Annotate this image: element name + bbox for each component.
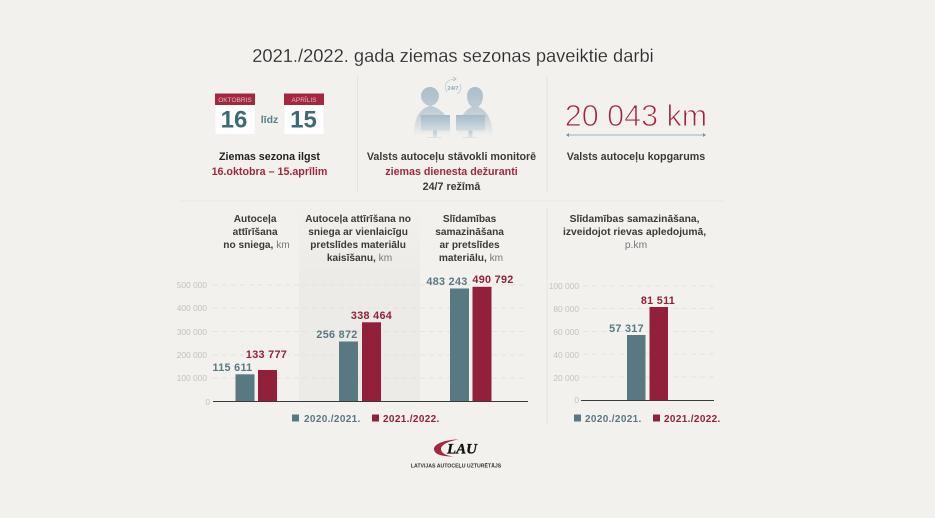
icon: calendar October 16: OKTOBRIS: [218, 97, 252, 104]
axis labels: [177, 280, 210, 407]
heading: slipperiness reduction: Slīdamības: [443, 214, 497, 225]
panel: left chart highlight: [299, 205, 420, 401]
heading: snow clearing: no sniega, km: [223, 240, 290, 251]
icon: two duty officers with 24/7: 24/7: [447, 86, 459, 92]
heading: rut icing: p.km: [625, 240, 647, 251]
bars: clearing with spreading: 338 464: [351, 310, 392, 322]
bars: rut icing: [609, 295, 675, 400]
text: until: līdz: [261, 114, 278, 126]
heading: slipperiness reduction: ar pretslīdes: [439, 240, 500, 251]
heading: rut icing: izveidojot rievas apledojumā,: [563, 227, 706, 238]
axis labels: 400 000: [177, 303, 207, 313]
text: road length caption: Valsts autoceļu kopgarums: [567, 151, 705, 163]
logo: LAU: [411, 440, 502, 470]
legend: right chart: 2021./2022.: [664, 414, 721, 425]
icon: calendar April 15: APRĪLIS: [292, 96, 317, 104]
axis labels: 300 000: [177, 327, 207, 337]
heading: snow clearing with spreading: sniega ar vienlaicīgu: [308, 227, 408, 238]
bars: rut icing: 81 511: [641, 295, 675, 307]
panel: monitoring duty officers: [367, 77, 536, 193]
arrow: length span: [566, 133, 706, 137]
heading: slipperiness reduction: samazināšana: [435, 227, 504, 238]
axis labels: 0: [574, 395, 579, 405]
logo: LAU: LATVIJAS AUTOCEĻU UZTURĒTĀJS: [411, 462, 502, 470]
axis labels: 100 000: [177, 373, 207, 383]
icon: calendar April 15: [284, 94, 324, 134]
text: monitoring caption: ziemas dienesta dežuranti: [385, 166, 518, 178]
bars: clearing with spreading: 256 872: [316, 329, 358, 341]
heading: rut icing: Slīdamības samazināšana,: [570, 214, 700, 225]
bars: snow clearing: [213, 349, 287, 401]
text: monitoring caption: Valsts autoceļu stāvokli monitorē: [367, 151, 536, 163]
heading: slipperiness reduction: materiālu, km: [439, 253, 503, 264]
text: season caption: Ziemas sezona ilgst: [219, 151, 320, 163]
axis labels: 20 000: [553, 373, 579, 383]
bars: slipperiness reduction: 490 792: [472, 274, 514, 286]
bars: slipperiness reduction: [426, 274, 514, 402]
axis labels: 40 000: [553, 350, 579, 360]
bars: clearing with spreading: [316, 310, 392, 402]
heading: snow clearing with spreading: Autoceļa attīrīšana no: [305, 214, 411, 225]
bars: rut icing: 57 317: [609, 323, 644, 335]
text: season caption: 16.oktobra – 15.aprīlim: [212, 166, 327, 178]
bar chart: rut icing: [549, 281, 714, 405]
axis labels: 0: [205, 397, 210, 407]
logo: LAU: LAU: [446, 442, 478, 458]
axis labels: 60 000: [553, 327, 579, 337]
bars: snow clearing: 133 777: [246, 349, 287, 361]
panel: season duration: [212, 94, 327, 178]
bar chart: kilometres by work type: [177, 274, 528, 407]
panel: total road length: [565, 99, 707, 163]
legend: right chart: [574, 414, 721, 425]
legend: left chart: 2020./2021.: [304, 414, 361, 425]
axis labels: 80 000: [553, 304, 579, 314]
axis labels: 500 000: [177, 280, 207, 290]
text: season caption: [212, 151, 327, 178]
title: 2021./2022. gada ziemas sezonas paveiktie darbi: [252, 45, 654, 66]
text: monitoring caption: [367, 151, 536, 193]
icon: calendar October 16: 16: [221, 106, 247, 134]
heading: snow clearing: Autoceļa: [234, 214, 277, 225]
text: 20 043 km: 20 043 km: [565, 99, 707, 133]
text: monitoring caption: 24/7 režīmā: [423, 181, 481, 193]
legend: left chart: [292, 414, 440, 425]
legend: left chart: 2021./2022.: [383, 414, 440, 425]
icon: calendar April 15: 15: [290, 106, 317, 134]
bars: snow clearing: 115 611: [213, 362, 252, 374]
icon: calendar October 16: [215, 94, 255, 134]
icon: two duty officers with 24/7: [414, 77, 493, 138]
heading: snow clearing: attīrīšana: [233, 227, 278, 238]
heading: snow clearing with spreading: kaisīšanu, km: [327, 253, 392, 264]
axis labels: 200 000: [177, 350, 207, 360]
axis labels: 100 000: [549, 281, 579, 291]
heading: snow clearing with spreading: pretslīdes materiālu: [310, 240, 406, 251]
axis labels: [549, 281, 579, 405]
legend: right chart: 2020./2021.: [585, 414, 642, 425]
bars: slipperiness reduction: 483 243: [426, 276, 468, 288]
